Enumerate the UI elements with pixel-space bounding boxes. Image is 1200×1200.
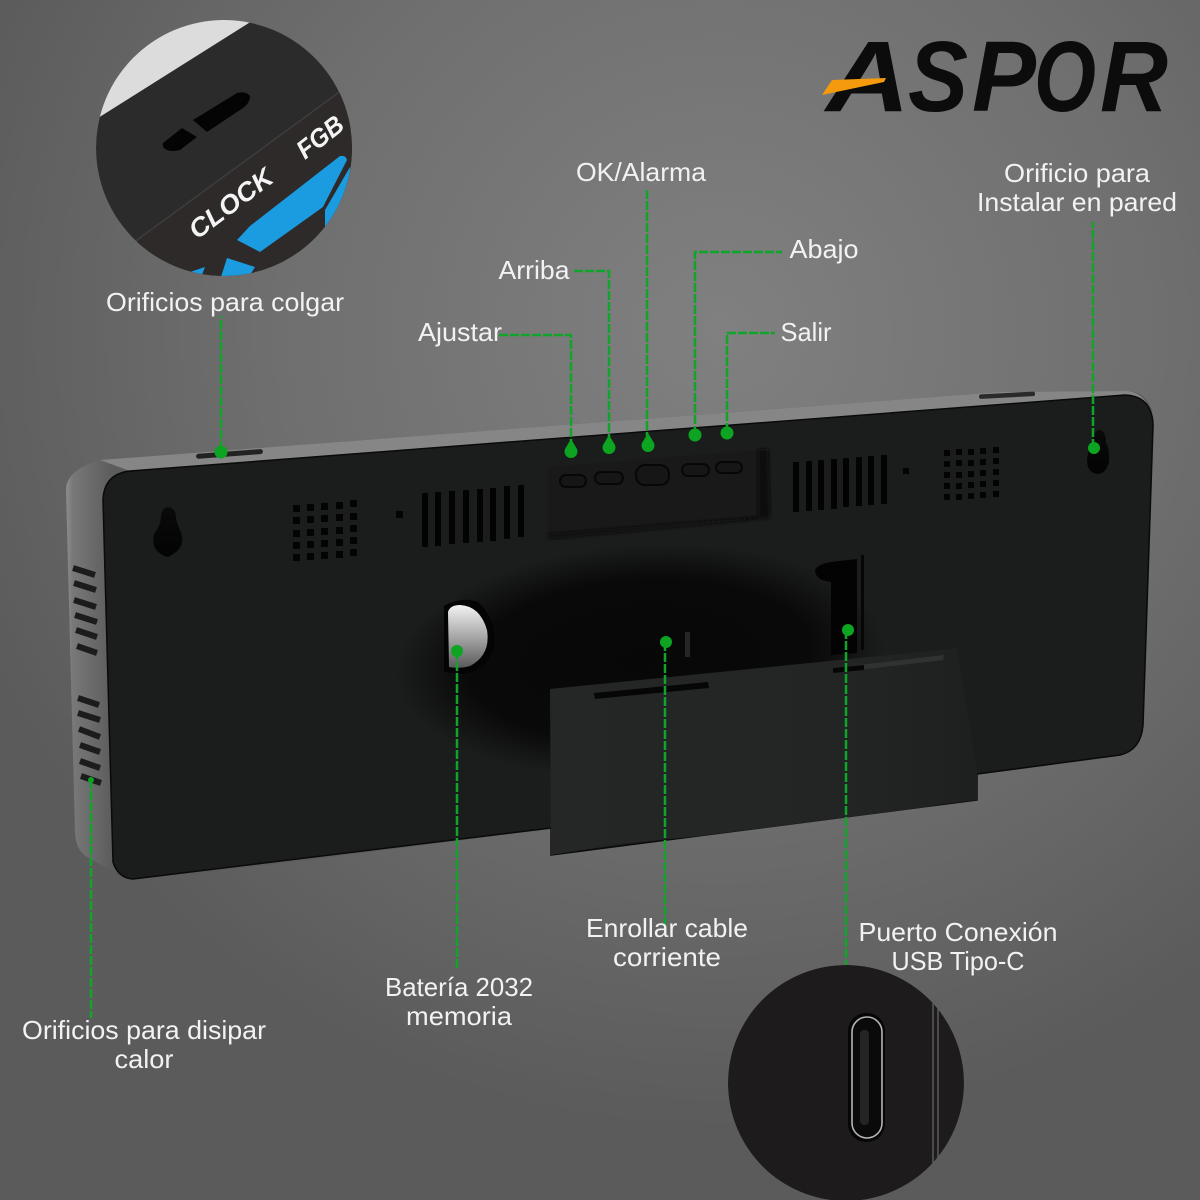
white surface: [100, 20, 250, 117]
inner recess shadow: [388, 528, 892, 792]
top bevel highlight: [100, 391, 1148, 471]
label: orificios para colgar: Orificios para colgar: [106, 287, 344, 317]
logo wordmark: P: [972, 21, 1036, 133]
fgb label: FGB: [290, 109, 350, 165]
battery halo: [444, 600, 495, 674]
clock label: CLOCK: [183, 160, 281, 245]
logo wordmark: R: [1100, 21, 1168, 133]
callout dots: [88, 426, 1100, 783]
logo accent: [822, 78, 886, 95]
usb recess edge: [861, 555, 864, 650]
device back panel: [66, 391, 1154, 882]
logo wordmark: S: [908, 21, 968, 133]
label: puerto conexion usb: USB Tipo-C: [892, 946, 1024, 976]
top slots: [196, 449, 263, 459]
label: arriba: Arriba: [498, 255, 570, 285]
inset: hanging holes: [96, 20, 352, 276]
label: enrollar cable corriente: Enrollar cable: [586, 913, 748, 943]
label: puerto conexion usb: [858, 917, 1058, 976]
keyhole right: [1087, 430, 1109, 474]
label: bateria 2032 memoria: Batería 2032: [385, 972, 533, 1002]
label: orificios para disipar calor: calor: [114, 1044, 174, 1074]
housing seam: [933, 1003, 938, 1165]
logo: [822, 21, 1168, 133]
speaker grille right: [944, 447, 999, 500]
battery cell: [448, 605, 488, 668]
lower panel: [136, 92, 352, 276]
label: ok alarma: OK/Alarma: [576, 157, 707, 187]
cable spool: [685, 632, 690, 657]
buttons: [560, 462, 742, 487]
label: salir: Salir: [780, 317, 832, 347]
cover slot right: [833, 655, 944, 673]
blue segments: [237, 156, 347, 252]
label: bateria 2032 memoria: [385, 972, 533, 1031]
button recess: [548, 449, 770, 537]
vent left: [422, 485, 524, 547]
label: ajustar: Ajustar: [418, 317, 502, 347]
keyhole left: [153, 507, 182, 557]
usb-c socket: [848, 1013, 885, 1142]
cover slot left: [594, 682, 709, 699]
slot hole: [163, 92, 250, 151]
label: bateria 2032 memoria: memoria: [406, 1001, 513, 1031]
label: puerto conexion usb: Puerto Conexión: [858, 917, 1058, 947]
label: enrollar cable corriente: corriente: [613, 942, 721, 972]
side vents: [73, 568, 101, 783]
inset: usb port: [728, 965, 964, 1200]
device casing bevel: [66, 391, 1154, 882]
logo wordmark: A: [823, 21, 910, 133]
speaker grille left: [293, 500, 357, 561]
label: orificio para instalar en pared: Instalar en pared: [977, 187, 1177, 217]
label: abajo: Abajo: [790, 234, 858, 264]
small dots: [396, 468, 909, 518]
label: orificio para instalar en pared: [977, 158, 1177, 217]
usb port recess: [815, 559, 857, 655]
vent right: [793, 455, 887, 512]
label: enrollar cable corriente: [586, 913, 748, 972]
usb-c tongue: [860, 1030, 869, 1125]
label: orificios para disipar calor: Orificios para disipar: [22, 1015, 266, 1045]
label: orificio para instalar en pared: Orificio para: [1004, 158, 1151, 188]
callout lines: [91, 188, 1093, 1018]
label: orificios para disipar calor: [22, 1015, 266, 1074]
device body: [103, 395, 1153, 879]
usb-c ring: [852, 1017, 882, 1138]
battery cover: [550, 648, 977, 855]
logo wordmark: O: [1034, 21, 1096, 133]
button recess shadow: [548, 449, 770, 539]
